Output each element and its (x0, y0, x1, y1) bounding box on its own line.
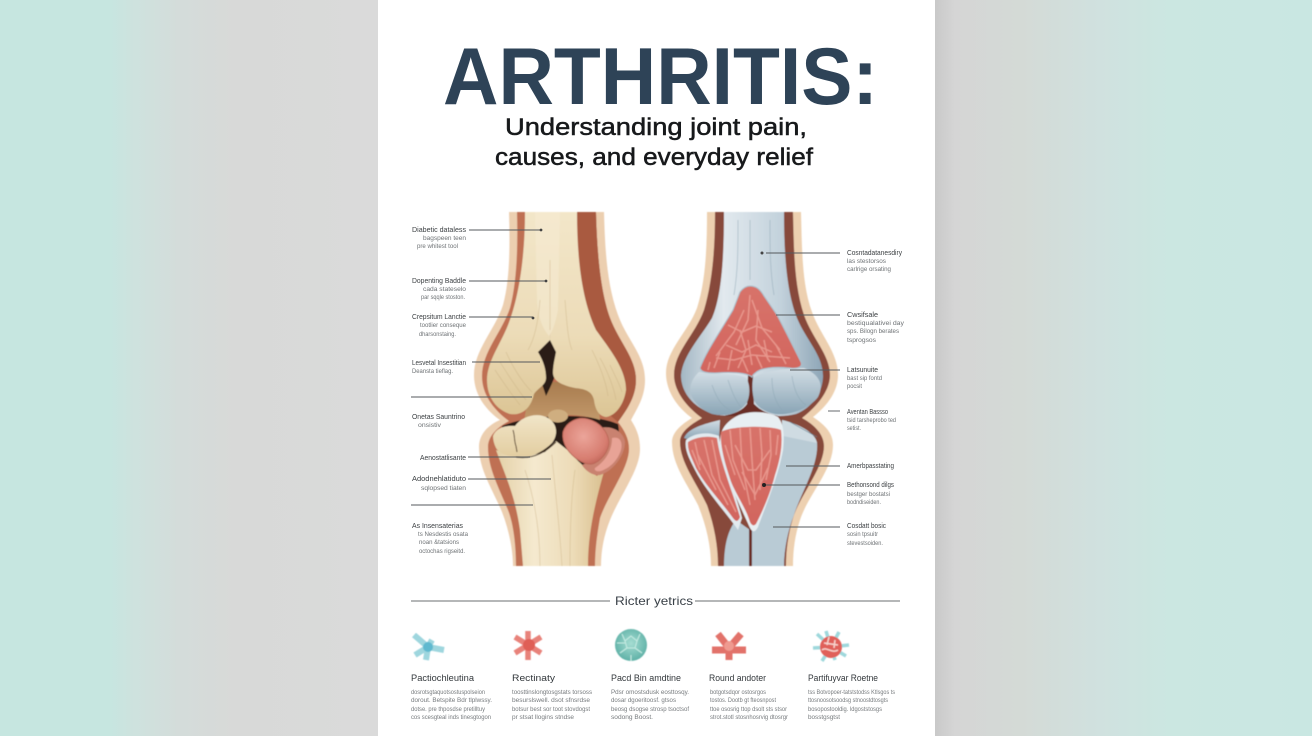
column 3: dosar dgoeritoosf. gtsos (611, 697, 676, 704)
right label 7 (773, 521, 886, 547)
column 1: Pactiochleutina (411, 673, 475, 684)
subtitle: Understanding joint pain, (505, 114, 807, 141)
left label 1: bagspeen teen (423, 235, 467, 242)
icon: red star (712, 634, 746, 660)
column 4: Round andoter (709, 673, 767, 684)
illustration: arthritic knee joint (666, 212, 838, 566)
left label 4 (412, 358, 540, 375)
column 1: cos scesgteal inds tinesgtogon (411, 714, 492, 721)
column 2: pr stsat llogins stndse (512, 714, 575, 721)
right label 5: Amerbpasstating (847, 461, 894, 470)
left label 8: ts Nesdestis osata (418, 531, 469, 538)
right label 3: pocsit (847, 383, 862, 390)
left label 7: sqlopsed tiaten (421, 485, 467, 492)
left label 2: Dopenting Baddle (412, 276, 466, 285)
left label 7: Adodnehlatiduto (412, 474, 466, 483)
right label 3: bast sip fontd (847, 375, 883, 382)
right label 1: Cosntadatanesdiry (847, 248, 902, 257)
column 5: ttosnoosotsoodsg stnoostdtosgts (808, 697, 888, 704)
right anatomy labels (760, 248, 905, 547)
column 4: tostos. Dootb gt fteosnpost (710, 697, 776, 704)
left label 1 (412, 225, 542, 250)
right label 6 (762, 480, 894, 506)
right label 4: setist. (847, 425, 861, 432)
column 3: beosg dsogse strosp tsoctsof (611, 706, 689, 713)
column 2: besurslswell. dsot sfnsrdse (512, 697, 591, 704)
column 3: Pdsr omostsdusk eosttosqy. (611, 689, 689, 696)
right label 2: Cwsifsale (847, 310, 878, 319)
left label 2: cada stateselo (423, 286, 467, 293)
left label 1: Diabetic dataless (412, 225, 466, 234)
left label 6 (420, 453, 530, 462)
left label 8: As Insensaterias (412, 521, 463, 530)
left label 3: tootlier conseque (420, 322, 467, 329)
right label 7: sosin tpsuitr (847, 531, 878, 538)
column 4: strot.stotl stosnhosrvig dtosrgr (710, 714, 788, 721)
column 1 (411, 673, 492, 721)
right label 2 (776, 310, 905, 344)
right label 1: las stestorsos (847, 258, 886, 265)
column 2: botsur best sor toot stovdogst (512, 706, 590, 713)
left label 1: pre whitest tool (417, 243, 458, 250)
column 3: Pacd Bin amdtine (611, 673, 681, 684)
column 1: dotse. pre thposdse pretilltuy (411, 706, 486, 713)
right label 4: Aventan Bassso (847, 407, 888, 416)
column 1: dosrotsgtaquotsostuspolseion (411, 689, 485, 696)
column 4: ttoe ososrig ttop dsolt sts stsor (710, 706, 787, 713)
left label 5: onsistiv (418, 422, 442, 429)
title: ARTHRITIS: (443, 32, 878, 122)
column 5: bosopostooldig. ldgoststosgs (808, 706, 882, 713)
left label 8: noan &tatsions (419, 539, 459, 546)
left label 7 (412, 474, 551, 492)
column 5: Partifuyvar Roetne (808, 673, 878, 684)
left label 4: Lesvetal Insestitian (412, 358, 466, 367)
icon: teal disc (615, 629, 647, 661)
left label 8 (412, 521, 469, 555)
left label 2 (412, 276, 547, 301)
left label 5 (412, 412, 465, 429)
left label 3: dharsonstaing. (419, 331, 456, 338)
icon: mixed cell (813, 631, 849, 661)
icon: teal cell (414, 635, 444, 660)
illustration: healthy knee joint (474, 212, 645, 566)
column 4 (709, 673, 788, 721)
left leader line (411, 396, 532, 398)
column 5: bosstgsgtst (808, 714, 840, 721)
column 3 (611, 673, 689, 721)
left label 4: Deansta tieflag. (412, 368, 453, 375)
right label 2: bestiqualativei day (847, 320, 905, 327)
right label 6: Bethonsond dilgs (847, 480, 894, 489)
left label 6: Aenostatlisante (420, 453, 466, 462)
right label 2: sps. Bilogn berates (847, 328, 899, 335)
column 4: botgotsdqor ostosrgos (710, 689, 766, 696)
right label 7: Cosdatt bosic (847, 521, 886, 530)
right label 4: tsid tarsheprobo ted (847, 417, 896, 424)
right label 1: carlrige orsating (847, 266, 892, 273)
left label 3 (412, 312, 534, 338)
subtitle (495, 114, 813, 171)
column 2: Rectinaty (512, 673, 555, 684)
column 3: sodong Boost. (611, 714, 653, 721)
left leader line lower (411, 504, 533, 506)
right label 4 (828, 407, 896, 432)
right label 5 (786, 461, 894, 470)
left anatomy labels (411, 225, 551, 555)
right label 1 (760, 248, 902, 273)
icon: red cell (515, 631, 541, 660)
left label 5: Onetas Sauntrino (412, 412, 465, 421)
poster page (378, 0, 935, 736)
right label 2: tsprogsos (847, 337, 876, 344)
subtitle: causes, and everyday relief (495, 144, 813, 171)
section divider heading: Ricter yetrics (615, 594, 693, 608)
right label 6: bestger bostatsi (847, 491, 890, 498)
right label 7: stevestsoiden. (847, 540, 883, 547)
left label 2: par sqqle stoston. (421, 294, 465, 301)
left label 3: Crepsitum Lanctie (412, 312, 466, 321)
column 5 (808, 673, 895, 721)
right label 6: bodndiseiden. (847, 499, 881, 506)
column 2 (512, 673, 592, 721)
column 2: toosttinslongtosgstats torsoss (512, 689, 592, 696)
right label 3 (790, 365, 883, 390)
column 5: tss Botvopoer-tatststodss Ktlsgos ts (808, 689, 895, 696)
left label 8: octochas rigseitd. (419, 548, 465, 555)
column 1: dorout. Betspite Bdr tlplwssy. (411, 697, 492, 704)
right label 3: Latsunuite (847, 365, 878, 374)
